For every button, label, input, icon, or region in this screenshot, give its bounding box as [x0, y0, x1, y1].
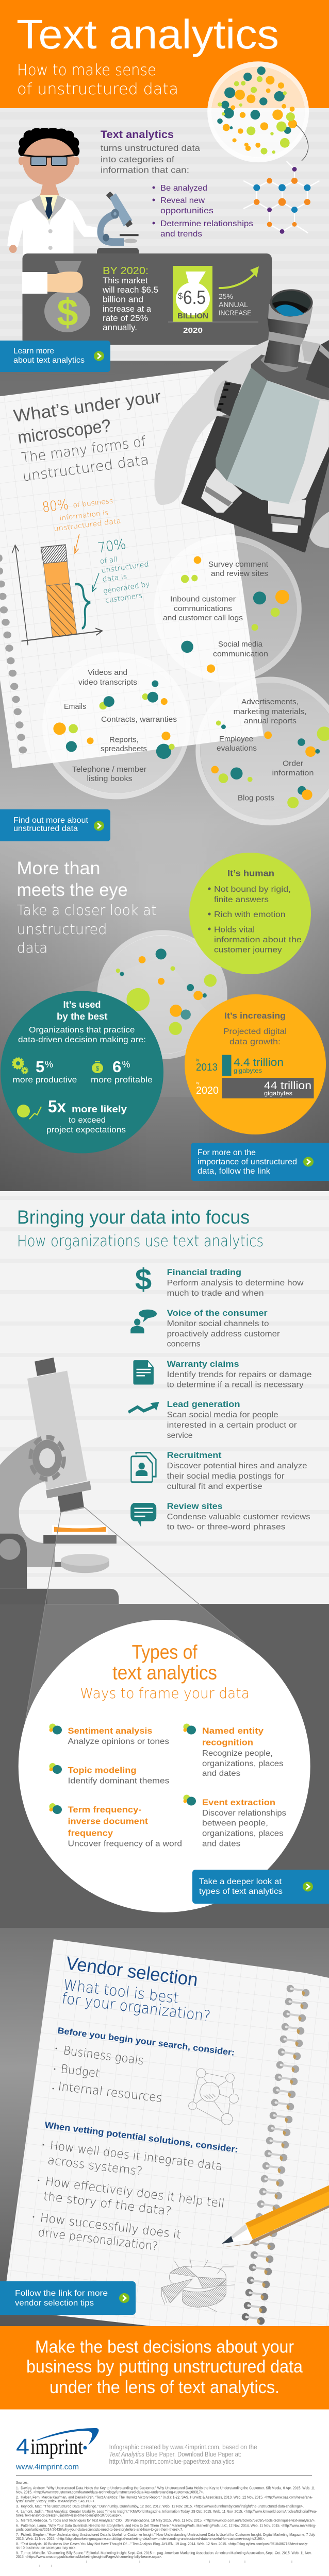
- bullet list: Reveal new: [160, 196, 205, 205]
- bar: 2020: by: [196, 1082, 199, 1085]
- sources: Nov. 2015. <http://www.mycustomer.com/feature/data-technology/unstructured-data-key-understanding-customer/169317>.: [16, 2489, 204, 2494]
- circle: it's used by the best: by the best: [57, 1011, 107, 1022]
- chart: 6.5 billion: 2020: [183, 326, 203, 335]
- item: financial trading: $: [135, 1263, 152, 1296]
- item: term frequency: Uncover frequency of a word: [68, 1839, 182, 1848]
- icon: gears: [12, 1058, 28, 1074]
- labels: forms of unstructured data: Contracts, warranties: [101, 716, 177, 724]
- item: sentiment analysis: [68, 1726, 169, 1746]
- labels: forms of unstructured data: Blog posts: [238, 794, 274, 803]
- labels: forms of unstructured data: spreadsheets: [101, 745, 147, 753]
- heading: more than meets the eye: More than: [17, 858, 100, 878]
- text: by 2020: [102, 265, 158, 332]
- heading: Ways to frame your data: [80, 1685, 250, 1702]
- annotation: 80 percent: of business: [73, 497, 113, 510]
- when vetting list: drive personalization?: [37, 2226, 159, 2253]
- sources: profs.com/articles/2014/26436/why-your-data-scientists-need-to-be-storytellers-and-how-to-get-them-there>.7.: [16, 2527, 183, 2532]
- circle: it's human: Holds vital: [214, 925, 255, 935]
- text: by 2020: will reach $6.5: [102, 285, 158, 295]
- objectives: [201, 468, 306, 533]
- item: review sites: Review sites: [167, 1501, 223, 1511]
- annotation: 70 percent: customers: [105, 591, 143, 605]
- heading: what's under your microscope: unstructured data: [22, 452, 150, 485]
- item: term frequency: [68, 1805, 182, 1848]
- when vetting list: the story of the data?: [43, 2190, 172, 2218]
- heading: vendor selection: What tool is best: [62, 1976, 180, 2007]
- item: event extraction: organizations, places: [202, 1829, 284, 1838]
- circle: it's used by the best: more productive: [12, 1076, 77, 1084]
- icon: money bag: [92, 1061, 103, 1073]
- before you begin list: Before you begin your search, consider:: [57, 2026, 235, 2058]
- item: financial trading: Perform analysis to determine how: [167, 1279, 304, 1287]
- logo: 4imprint: [15, 2428, 99, 2471]
- item: review sites: [130, 1501, 310, 1532]
- circle: it's used by the best: data-driven decision making are:: [18, 1036, 146, 1044]
- circle: it's increasing: data growth:: [229, 1038, 281, 1046]
- button: vendor selection tips: vendor selection tips: [15, 2299, 94, 2308]
- focus knob: [211, 378, 241, 416]
- labels: forms of unstructured data: Videos and: [88, 669, 127, 677]
- sources: 3. Keylock, Matt. “The Unstructured Data Challenge.” Dunnhumby. Dunnhumby, 12 Dec. 2012. Web. 12 Nov. 2015. <https://www.dunnhumby.com/insight/the-unstructured-data-challenge>.: [16, 2504, 304, 2509]
- heading: more than meets the eye: Take a closer look at: [17, 902, 157, 919]
- use case list: [128, 1263, 312, 1532]
- circle: it's used by the best: 5: [36, 1058, 44, 1076]
- heading: what's under your microscope: [12, 387, 162, 485]
- item: event extraction: Event extraction: [202, 1798, 275, 1807]
- when vetting list: When vetting potential solutions, consider:: [44, 2120, 239, 2155]
- button: for more on the importance: importance of unstructured: [198, 1158, 297, 1166]
- sources: sis-10-business-use-cases-you-may-not>.: [16, 2546, 76, 2550]
- bar: 2020: 44 trillion: [264, 1080, 311, 1092]
- chart: 6.5 billion: [168, 266, 259, 335]
- item: event extraction: Discover relationships: [202, 1809, 286, 1818]
- right eyepiece: [306, 340, 329, 388]
- sources: lysts/Hurwitz_Victory_Index-TextAnalytics_SAS.PDF>.: [16, 2499, 95, 2503]
- bar chart sketch: [12, 534, 102, 645]
- circle: it's used by the best: more likely: [72, 1104, 127, 1114]
- credit text: Text Analytics Blue Paper. Download Blue Paper at:: [109, 2451, 241, 2458]
- heading: more than meets the eye: [17, 858, 157, 956]
- circle: it's used by the best: %: [122, 1059, 130, 1070]
- before you begin list: [53, 2026, 235, 2105]
- annotation: 80 percent: information is: [59, 509, 109, 522]
- before you begin list: Business goals: [62, 2044, 144, 2067]
- item: voice of the consumer: Voice of the consumer: [167, 1308, 268, 1318]
- labels: forms of unstructured data: Order: [283, 760, 303, 768]
- button: vendor selection tips: Follow the link for more: [15, 2289, 108, 2298]
- when vetting list: across systems?: [47, 2154, 143, 2179]
- bullet list: opportunities: [160, 207, 213, 215]
- chart: 6.5 billion: BILLION: [177, 312, 208, 320]
- annotation: 70 percent: of all: [100, 555, 118, 566]
- item: event extraction: and dates: [202, 1839, 240, 1848]
- item: term frequency: frequency: [68, 1828, 113, 1838]
- heading: vendor selection: Vendor selection: [65, 1952, 199, 1990]
- circle: it's used by the best: project expectations: [46, 1126, 126, 1134]
- body: [216, 367, 329, 504]
- heading: [80, 1641, 250, 1702]
- heading: text analytics: [112, 1663, 217, 1684]
- item: financial trading: much to trade and when: [167, 1289, 264, 1298]
- item: sentiment analysis: Sentiment analysis: [68, 1726, 153, 1736]
- notebook spiral: [242, 1985, 309, 2325]
- circle: it's used by the best: to exceed: [69, 1116, 106, 1125]
- arm crescent: [154, 340, 329, 505]
- left eyepiece: [260, 289, 313, 372]
- item: warranty claims: [133, 1359, 312, 1389]
- item: term frequency: Term frequency-: [68, 1805, 141, 1815]
- circle: it's increasing: Projected digital: [223, 1027, 287, 1036]
- chart: 6.5 billion: $: [178, 291, 183, 301]
- credit text: http://info.4imprint.com/blue-paper/text-analytics: [109, 2458, 235, 2465]
- annotation: 70 percent: [96, 536, 151, 605]
- intro text block: [101, 129, 201, 175]
- item: event extraction: [202, 1798, 286, 1848]
- petri dish B: [45, 655, 188, 796]
- circle: it's human: customer journey: [214, 946, 282, 955]
- sketch: pie chart: [161, 2258, 235, 2312]
- header band: [0, 0, 329, 108]
- item: lead generation: Lead generation: [167, 1399, 240, 1409]
- labels: forms of unstructured data: communication: [213, 650, 268, 658]
- labels: forms of unstructured data: marketing materials,: [234, 708, 307, 716]
- molecule network: [243, 161, 319, 234]
- item: sentiment analysis: Analyze opinions or tones: [68, 1737, 169, 1746]
- annotation: 70 percent: generated by: [103, 580, 151, 596]
- bar: 2020: [196, 1078, 314, 1098]
- labels: forms of unstructured data: Advertisements,: [241, 698, 299, 706]
- pencil: [220, 2185, 329, 2248]
- item: named entity recognition: [202, 1726, 284, 1778]
- when vetting list: How well does it integrate data: [49, 2139, 223, 2174]
- item: lead generation: service: [167, 1431, 193, 1440]
- labels: forms of unstructured data: communications: [174, 605, 232, 613]
- petri dish C: [198, 680, 329, 822]
- intro text block: information that can:: [101, 165, 189, 175]
- sources: tures/Text-analytics-greater-usability-less-time-to-insight-107036.aspx>.: [16, 2513, 122, 2518]
- item: term frequency: inverse document: [68, 1817, 148, 1826]
- bar: 2013: by: [196, 1059, 199, 1062]
- bar: 2013: [196, 1055, 284, 1076]
- circle: it's used by the best: %: [45, 1059, 53, 1070]
- item: topic modeling: [68, 1766, 170, 1786]
- sources: [16, 2480, 317, 2559]
- button: vendor selection tips: [0, 2281, 136, 2315]
- intro text block: into categories of: [101, 155, 174, 164]
- closing banner: [0, 2326, 329, 2410]
- small microscope: [97, 192, 139, 257]
- subtitle: How to make sense: [17, 61, 156, 79]
- large microscope: side view: [0, 1358, 119, 1604]
- item: named entity recognition: organizations, places: [202, 1759, 284, 1768]
- sketch: network diagram: [189, 2069, 238, 2125]
- annotation: 80 percent: [41, 497, 122, 533]
- circle: it's used by the best: It’s used: [63, 999, 101, 1010]
- circle: it's human: information about the: [214, 936, 302, 944]
- item: named entity recognition: and dates: [202, 1769, 240, 1778]
- item: recruitment: [131, 1450, 307, 1491]
- dark panel: market forecast: [22, 253, 272, 345]
- circle: it's human: finite answers: [214, 895, 269, 904]
- item: recruitment: Recruitment: [167, 1450, 222, 1460]
- item: recruitment: Discover potential hires and analyze: [167, 1462, 307, 1470]
- chart: 6.5 billion: ANNUAL: [219, 301, 249, 309]
- annotation: 70 percent: 70%: [96, 536, 127, 556]
- item: warranty claims: Warranty claims: [167, 1359, 239, 1369]
- item: recruitment: cultural fit and expertise: [167, 1482, 262, 1491]
- labels: forms of unstructured data: and review sites: [211, 570, 268, 578]
- circle: it's used by the best: Organizations that practice: [29, 1026, 135, 1035]
- before you begin list: Budget: [60, 2062, 101, 2080]
- button: for more on the importance: For more on the: [198, 1148, 256, 1157]
- when vetting list: How successfully does it: [39, 2211, 182, 2242]
- heading: what's under your microscope: What’s under your: [12, 387, 162, 426]
- labels: forms of unstructured data: information: [272, 769, 314, 777]
- bullet list: Be analyzed: [160, 184, 207, 193]
- petri dish: data: [209, 64, 307, 160]
- button: for more on the importance: [191, 1143, 329, 1181]
- stage plate: [183, 417, 329, 551]
- scientist figure: [7, 128, 98, 256]
- bullet list: [153, 184, 253, 239]
- labels: forms of unstructured data: Telephone / member: [72, 766, 146, 774]
- circle: it's used by the best: 6: [112, 1058, 121, 1076]
- circle: it's increasing: It’s increasing: [224, 1011, 286, 1021]
- item: event extraction: between people,: [202, 1819, 268, 1828]
- item: warranty claims: Identify trends for repairs or damage: [167, 1370, 312, 1379]
- button: learn more: about text analytics: [13, 356, 85, 365]
- heading: bringing your data into focus: How organizations use text analytics: [17, 1232, 264, 1250]
- heading: bringing your data into focus: Bringing your data into focus: [17, 1207, 250, 1228]
- intro text block: turns unstructured data: [101, 143, 201, 153]
- circle: it's human: Rich with emotion: [214, 910, 286, 919]
- item: topic modeling: Topic modeling: [68, 1766, 136, 1775]
- button: learn more: [0, 341, 110, 372]
- button: find out more: [0, 809, 110, 841]
- labels: forms of unstructured data: evaluations: [217, 744, 257, 753]
- heading: vendor selection: for your organization?: [61, 1989, 211, 2025]
- chart: 6.5 billion: 6.5: [183, 287, 206, 308]
- item: financial trading: [135, 1263, 304, 1298]
- bar: 2020: 2020: [196, 1085, 219, 1096]
- labels: forms of unstructured data: Employee: [219, 735, 253, 743]
- item: named entity recognition: recognition: [202, 1738, 253, 1748]
- item: voice of the consumer: concerns: [167, 1340, 201, 1349]
- annotation: 80 percent: unstructured data: [54, 517, 122, 533]
- item: named entity recognition: Recognize people,: [202, 1749, 273, 1758]
- when vetting list: How effectively does it help tell: [44, 2175, 225, 2211]
- heading: more than meets the eye: unstructured: [17, 921, 107, 938]
- text: by 2020: rate of 25%: [103, 313, 148, 323]
- button: take a deeper look: types of text analytics: [199, 1887, 283, 1896]
- button: find out more: unstructured data: [13, 824, 78, 833]
- heading: vendor selection: [61, 1952, 211, 2025]
- closing banner: Make the best decisions about your: [35, 2337, 294, 2357]
- bullet list: and trends: [160, 230, 202, 239]
- icon: hand with money bag: [22, 261, 90, 334]
- icon: hand with money bag: $: [57, 291, 78, 334]
- petri dish A: [156, 538, 299, 680]
- item: recruitment: their social media postings for: [167, 1472, 285, 1481]
- credit text: [16, 2444, 312, 2476]
- heading: Types of: [132, 1641, 198, 1663]
- item: review sites: Condense valuable customer reviews: [167, 1513, 310, 1521]
- item: voice of the consumer: Monitor social channels to: [167, 1319, 269, 1328]
- before you begin list: Internal resources: [57, 2080, 163, 2105]
- icon: pie and trend: [17, 1105, 41, 1119]
- item: lead generation: interested in a certain product or: [167, 1421, 297, 1430]
- bar: 2013: gigabytes: [234, 1067, 262, 1074]
- bar: 2013: 2013: [196, 1062, 218, 1073]
- labels: forms of unstructured data: video transcripts: [78, 679, 137, 687]
- item: review sites: to two- or three-word phrases: [167, 1523, 286, 1532]
- white circle: types of text analytics: [19, 1620, 310, 1912]
- labels: forms of unstructured data: Survey comment: [208, 561, 268, 569]
- heading: bringing your data into focus: [17, 1207, 264, 1250]
- arrow: dish to molecule: [296, 125, 308, 161]
- button: take a deeper look: [192, 1870, 329, 1904]
- item: financial trading: Financial trading: [167, 1267, 241, 1277]
- text: by 2020: billion and: [103, 295, 143, 304]
- labels: forms of unstructured data: Emails: [64, 703, 86, 711]
- sources: 2015. <https://www.ama.org/publications/MarketingInsights/Pages/channeling-billy-beane.aspx>.: [16, 2554, 162, 2559]
- bar: 2013: 4.4 trillion: [234, 1057, 284, 1069]
- logo: 4imprint: www.4imprint.com: [15, 2463, 79, 2471]
- circle: it's human: [189, 853, 311, 974]
- paper: notebook page 1: [0, 369, 264, 768]
- closing banner: under the lens of text analytics.: [50, 2378, 279, 2397]
- when vetting list: [33, 2120, 239, 2253]
- closing banner: business by putting unstructured data: [26, 2357, 303, 2377]
- bar: 2020: gigabytes: [264, 1090, 292, 1097]
- item: voice of the consumer: [130, 1308, 280, 1349]
- paper: vendor notebook: [3, 1939, 329, 2326]
- item: voice of the consumer: proactively address customer: [167, 1330, 280, 1338]
- labels: forms of unstructured data: Inbound customer: [170, 596, 236, 604]
- heading: what's under your microscope: The many forms of: [21, 434, 147, 466]
- item: topic modeling: Identify dominant themes: [68, 1776, 170, 1786]
- heading: what's under your microscope: microscope?: [17, 416, 112, 448]
- item: named entity recognition: Named entity: [202, 1726, 264, 1736]
- title: Text analytics: [17, 11, 279, 57]
- bullet list: Determine relationships: [160, 219, 253, 228]
- button: learn more: Learn more: [13, 347, 54, 355]
- intro text block: Text analytics: [101, 129, 174, 141]
- labels: forms of unstructured data: Reports,: [109, 736, 139, 744]
- chart: 6.5 billion: 25%: [219, 293, 233, 300]
- circle: it's used by the best: [1, 991, 163, 1153]
- labels: forms of unstructured data: Social media: [218, 640, 263, 649]
- large microscope: top-down view: [154, 289, 329, 551]
- item: lead generation: Scan social media for people: [167, 1411, 278, 1419]
- credit text: Infographic created by www.4imprint.com, based on the: [109, 2444, 257, 2451]
- heading: more than meets the eye: meets the eye: [17, 880, 128, 900]
- logo: 4imprint: 4: [16, 2434, 29, 2459]
- circle: it's increasing: [185, 994, 326, 1134]
- button: for more on the importance: data, follow the link: [198, 1167, 270, 1176]
- subtitle: [17, 61, 178, 98]
- chart: 6.5 billion: INCREASE: [219, 309, 252, 317]
- labels: forms of unstructured data: [64, 561, 314, 803]
- head: [251, 354, 329, 400]
- heading: more than meets the eye: data: [17, 939, 47, 956]
- sources: Sources:: [16, 2480, 28, 2485]
- circle: it's human: Not bound by rigid,: [214, 885, 291, 894]
- logo: 4imprint: imprint: [30, 2435, 83, 2459]
- button: find out more: Find out more about: [13, 816, 89, 825]
- subtitle: of unstructured data: [17, 80, 178, 98]
- light cone: [25, 1507, 245, 1722]
- labels: forms of unstructured data: annual reports: [244, 717, 297, 725]
- annotation: 70 percent: unstructured: [101, 560, 150, 575]
- sources: 2015. Web. 11 Nov. 2015. <http://digitalmarketingmagazine.co.uk/digital-marketing-data/how-understanding-unstructured-data-is-useful-for-customer-insight/2198>.: [16, 2536, 265, 2541]
- circle: it's human: It’s human: [227, 869, 274, 878]
- annotation: 70 percent: data is: [102, 572, 127, 584]
- notebook holes: [0, 555, 27, 754]
- item: warranty claims: to determine if a recall is necessary: [167, 1381, 304, 1389]
- text: by 2020: increase at a: [103, 304, 152, 314]
- petri dish: centre: [63, 933, 225, 1097]
- annotation: 80 percent: 80%: [41, 497, 69, 516]
- labels: forms of unstructured data: and customer call logs: [163, 614, 243, 622]
- text: by 2020: This market: [103, 276, 148, 285]
- labels: forms of unstructured data: listing books: [87, 775, 132, 783]
- circle: it's used by the best: 5x: [48, 1097, 67, 1116]
- icon: money bag: $: [96, 1065, 100, 1072]
- button: take a deeper look: Take a deeper look at: [199, 1877, 282, 1886]
- circle: it's used by the best: more profitable: [91, 1076, 153, 1084]
- text: by 2020: BY 2020:: [103, 265, 149, 277]
- item: lead generation: [128, 1399, 297, 1440]
- text: by 2020: annually.: [103, 323, 137, 332]
